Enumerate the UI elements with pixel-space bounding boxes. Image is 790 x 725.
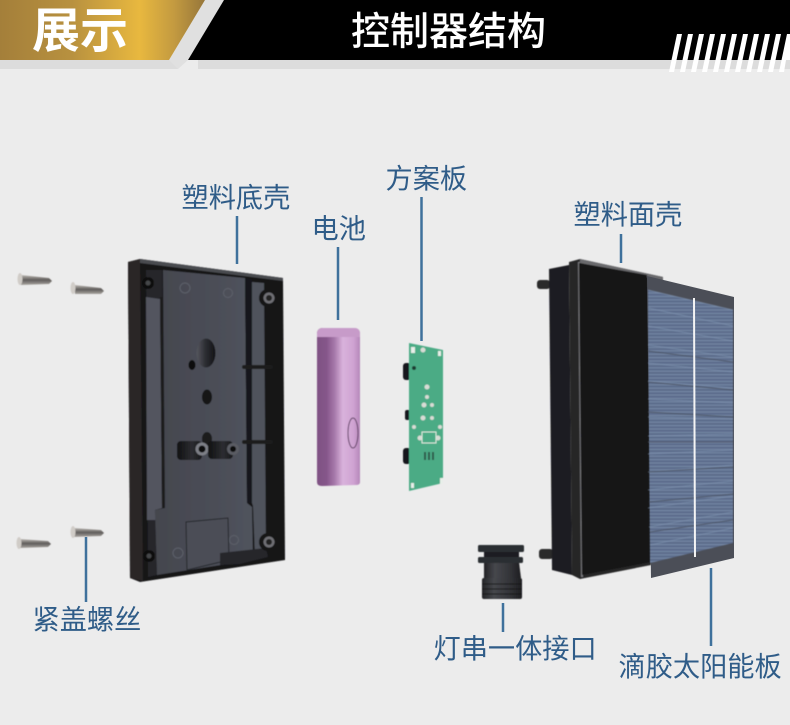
front shell: [537, 259, 663, 579]
gold title tab: [0, 0, 205, 60]
screw 1: [18, 273, 52, 285]
label: battery: 电池: [312, 213, 366, 244]
label: PCB: 方案板: [386, 163, 467, 194]
label: plastic back shell: 塑料底壳: [182, 182, 290, 213]
clips: [242, 365, 273, 444]
corner posts: [142, 277, 277, 562]
label: integrated light string connector: 灯串一体接口: [434, 633, 597, 664]
inner panel: [155, 270, 253, 575]
standoffs: [177, 441, 239, 460]
label: cover screws: 紧盖螺丝: [32, 604, 141, 635]
solar panel: [647, 276, 734, 578]
section title: 控制器结构: [351, 11, 546, 54]
solar cells: [648, 290, 733, 563]
label: plastic back shell: [182, 182, 290, 264]
mounting pegs: [537, 280, 553, 559]
label: plastic front shell: 塑料面壳: [574, 199, 682, 230]
battery door: [186, 518, 229, 570]
label: epoxy solar panel: 滴胶太阳能板: [618, 651, 782, 682]
plastic back shell: [128, 259, 285, 582]
screw 3: [16, 537, 51, 549]
label: battery: [312, 213, 366, 320]
decorative stripes: [669, 34, 790, 72]
solder points: [412, 348, 442, 440]
screw 4: [70, 526, 104, 538]
screws: [16, 273, 104, 549]
PCB: [403, 343, 443, 491]
connector: [478, 545, 524, 599]
white busbar: [693, 298, 696, 557]
faint moulded circles: [173, 283, 238, 558]
black title bar: [188, 0, 790, 60]
label: cover screws: [32, 537, 141, 635]
screw 2: [70, 282, 104, 294]
battery: [317, 328, 360, 486]
header band: [0, 0, 790, 72]
mounting holes: [188, 338, 216, 446]
label: plastic front shell: [574, 199, 682, 263]
tab heading: 展示: [32, 5, 128, 58]
